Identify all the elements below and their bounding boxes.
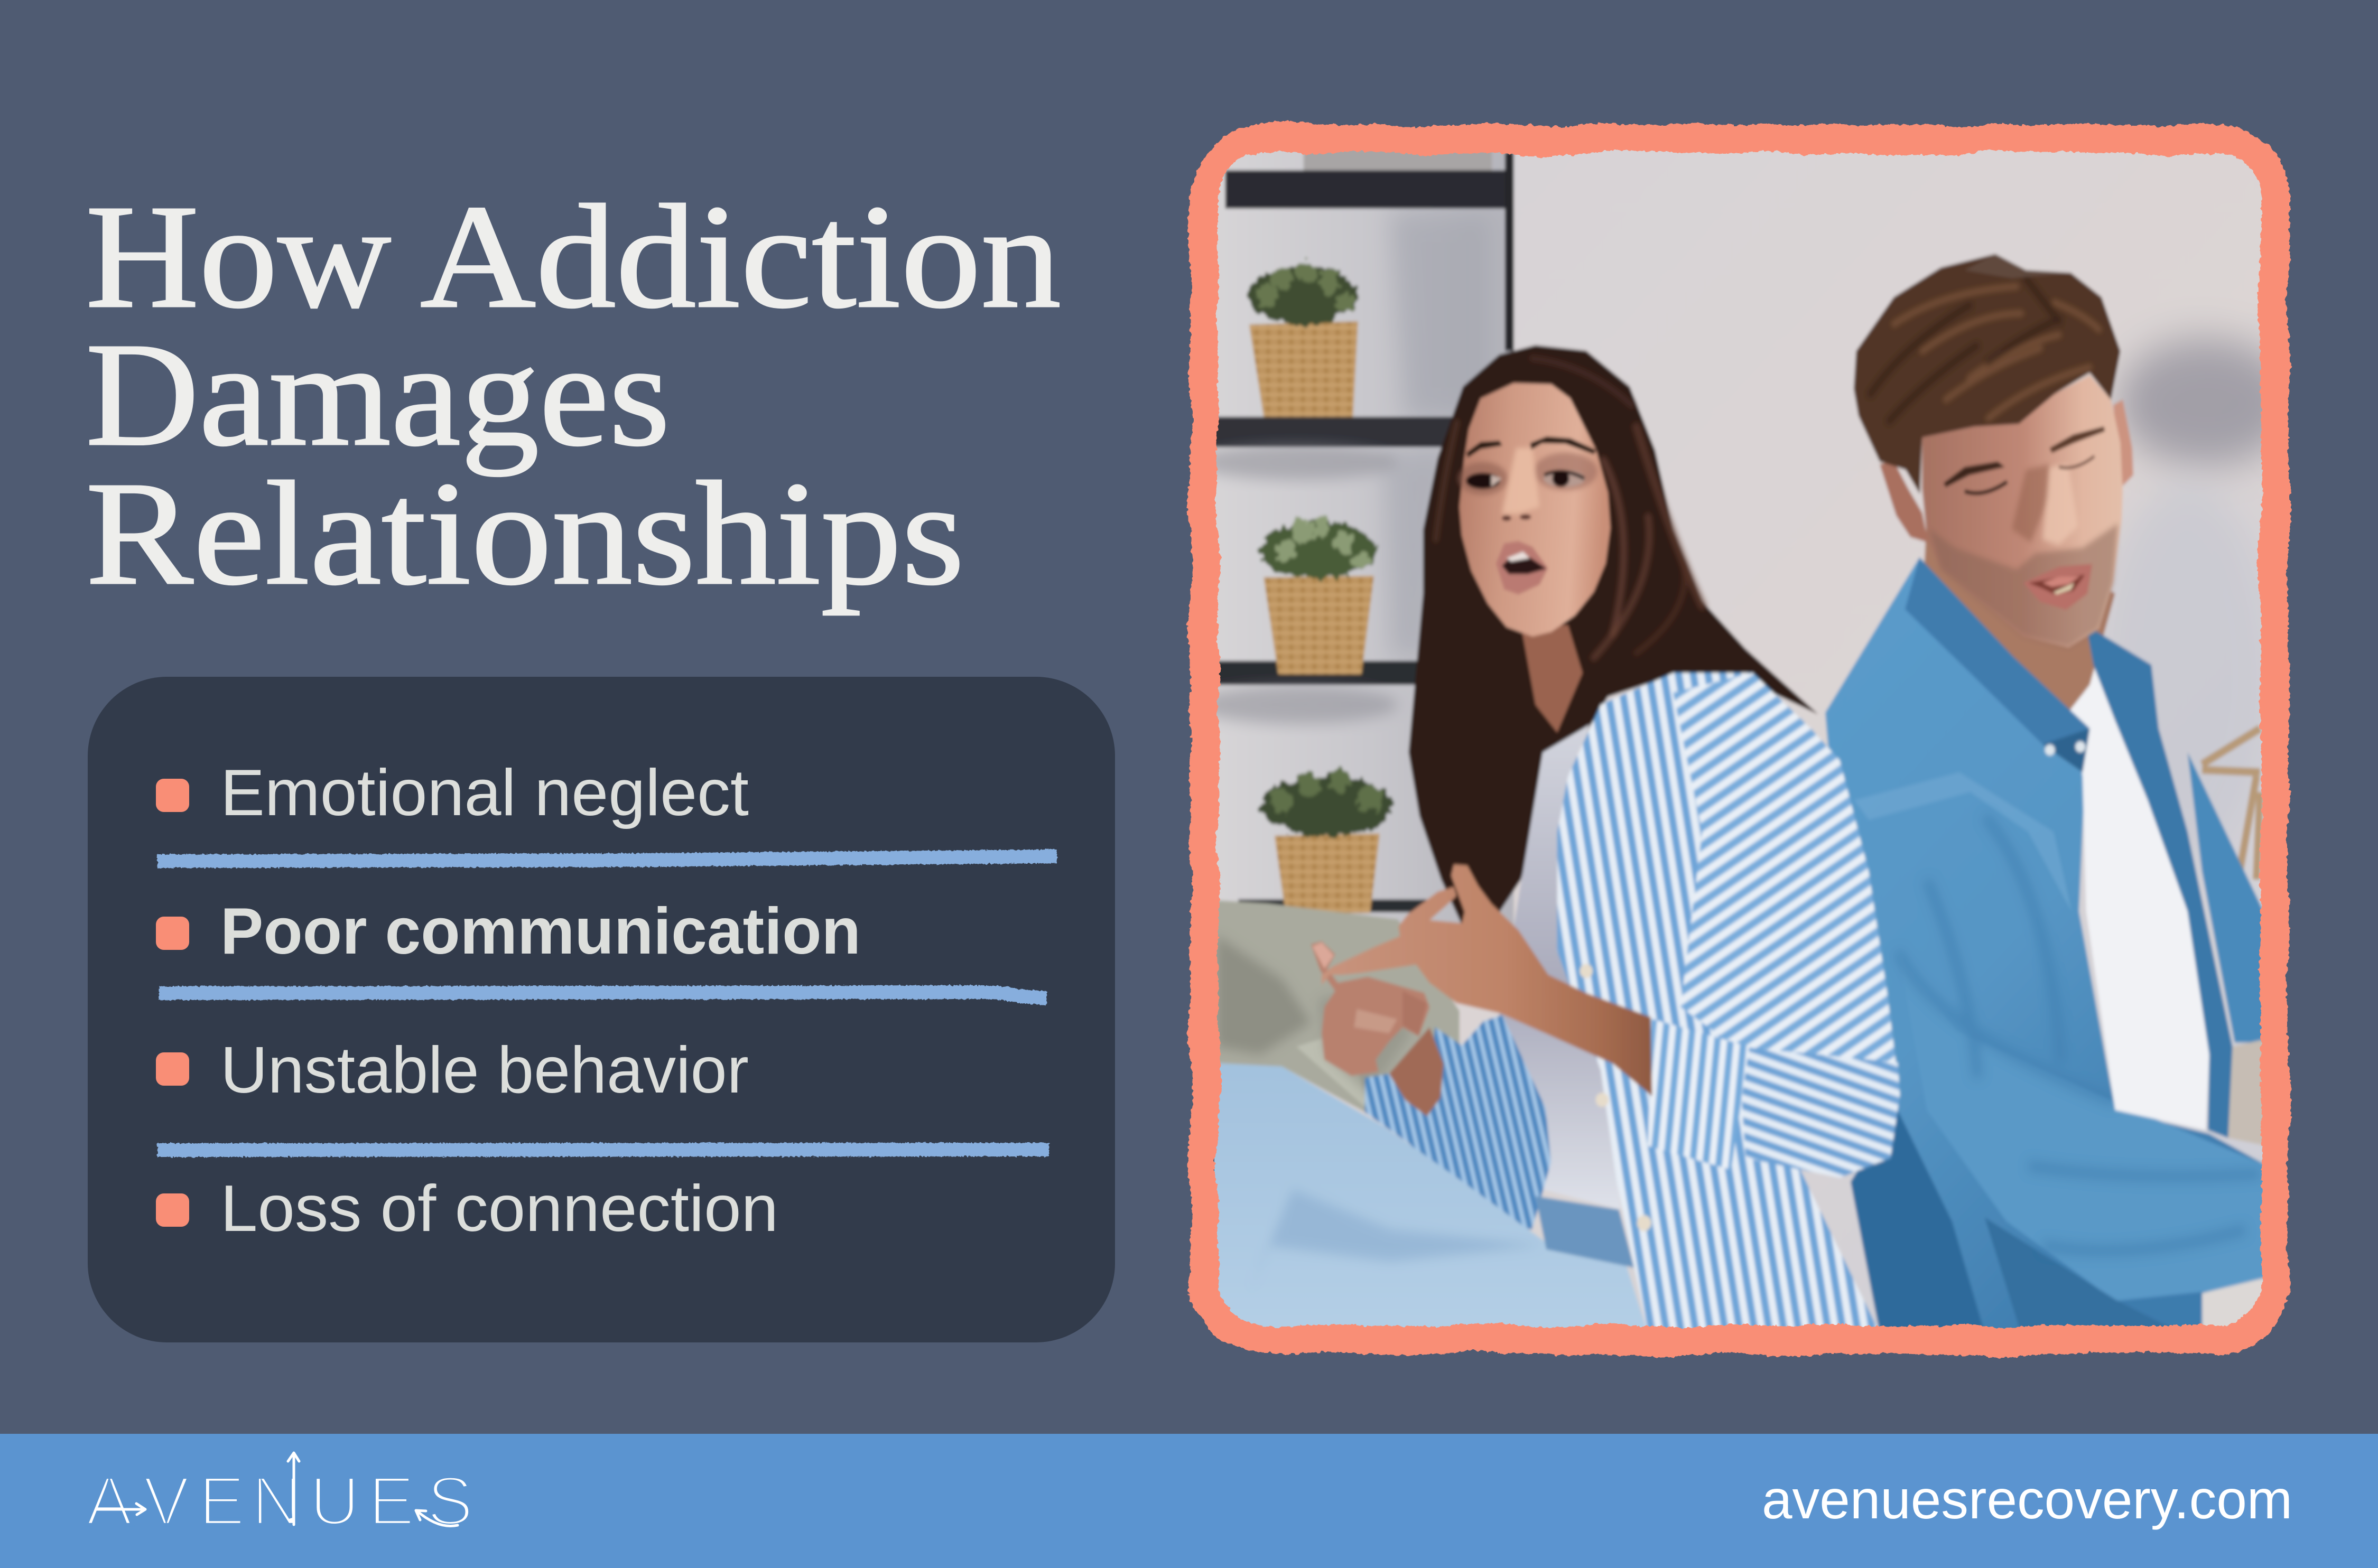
woman: lower hand [1311, 941, 1429, 1076]
list item: loss of connection: Loss of connection [220, 1172, 778, 1245]
title [86, 174, 1061, 615]
woman: neck [1521, 625, 1583, 732]
potted plant 2 [1260, 518, 1376, 675]
man: head [1854, 254, 2133, 648]
title: How [86, 174, 391, 339]
title: Damages [86, 312, 670, 477]
woman: left sleeve [1365, 1015, 1551, 1229]
woman: wrist [1389, 1027, 1444, 1116]
man: ears [1880, 399, 2133, 543]
list item: unstable behavior: Unstable behavior [220, 1034, 749, 1107]
man: collar [1905, 557, 2090, 772]
panel: list of relationship effects [88, 677, 1115, 1342]
list item: poor communication: Poor communication [220, 895, 861, 968]
wall [1287, 149, 2264, 1327]
man: neck [1923, 514, 2115, 741]
man: face [1922, 375, 2123, 648]
man: denim shirt [1825, 557, 2268, 1333]
website url: avenuesrecovery.com [1762, 1469, 2292, 1530]
coral brush frame [1204, 139, 2275, 1340]
logo: Avenues wordmark with arrows: AVENUES [86, 1462, 473, 1539]
woman: face [1458, 383, 1610, 637]
divider line 1 [157, 856, 1057, 861]
photo: couple sitting back to back [1195, 140, 2293, 1341]
woman: striped shirt [1557, 673, 1900, 1333]
photo panel: arguing couple with coral frame [1195, 139, 2293, 1341]
woman: t-shirt [1499, 724, 1621, 1210]
wicker chair [2202, 729, 2260, 880]
title: Relationships [86, 451, 964, 615]
man: white t-shirt [2068, 665, 2209, 1130]
woman: hands and forearm [1311, 864, 1652, 1116]
woman: hair [1409, 345, 1818, 927]
woman: head [1458, 383, 1610, 637]
potted plant 1 [1247, 260, 1358, 417]
sofa cushions [1202, 900, 1460, 1114]
woman: jeans [1202, 1062, 1648, 1333]
potted plant 3 [1261, 768, 1392, 913]
footer bar [0, 1434, 2378, 1568]
title: Addiction [420, 174, 1061, 339]
list item: emotional neglect: Emotional neglect [220, 757, 749, 829]
woman: upper hand and forearm [1322, 864, 1652, 1096]
shelving unit [1195, 140, 1513, 927]
divider line 2 [159, 992, 1047, 998]
man: hair [1854, 254, 2120, 494]
man: right shirt panel and sleeve [2086, 625, 2268, 1333]
